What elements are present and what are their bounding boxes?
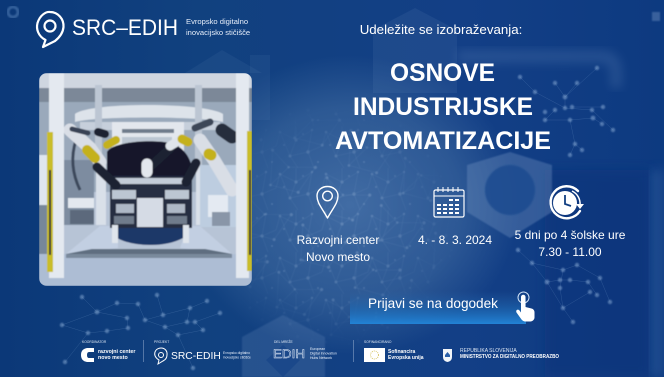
logo: SRC-EDIH small: PROJEKT	[154, 340, 169, 344]
logo: SRC-EDIH small: Evropsko digitalno	[223, 351, 250, 355]
icon: location speech pin	[37, 12, 64, 47]
icon: calendar	[434, 187, 464, 217]
icon: clock with arrow	[551, 186, 584, 218]
network: lower right	[516, 248, 612, 324]
logo tagline: inovacijsko stičišče	[186, 28, 250, 37]
info: date	[418, 187, 492, 247]
safety columns	[49, 73, 64, 278]
logo: SRC-EDIH small	[154, 340, 251, 364]
logo: EDIH network: EDIH	[273, 347, 305, 361]
icon: map pin	[317, 186, 338, 218]
logo: EU co-funded	[364, 340, 424, 362]
info: schedule	[515, 186, 626, 259]
photo: robot arms assembling a car	[39, 73, 252, 286]
logo: EDIH network: European	[310, 347, 325, 351]
logo wordmark: SRC–EDIH	[72, 15, 178, 40]
logo: EDIH network: Hubs Network	[310, 356, 332, 360]
logo: razvojni center novo mesto: novo mesto	[98, 355, 128, 361]
logo: razvojni center novo mesto	[81, 340, 135, 362]
logo: EDIH network: Digital Innovation	[310, 352, 337, 356]
logo: razvojni center novo mesto: KOORDINATOR	[82, 340, 107, 344]
title	[335, 59, 551, 155]
car	[107, 141, 193, 178]
icon: tapping hand	[516, 292, 534, 322]
logo: EU co-funded: Evropska unija	[388, 355, 424, 361]
schedule text: 5 dni po 4 šolske ure	[515, 228, 626, 242]
network: lower left	[60, 293, 222, 370]
logo tagline: Evropsko digitalno	[186, 17, 248, 26]
logo: SRC-EDIH small: inovacijsko stičišče	[223, 356, 251, 360]
date text: 4. - 8. 3. 2024	[418, 233, 492, 247]
logo: razvojni center novo mesto: razvojni center	[98, 349, 135, 355]
logo: EDIH network	[273, 339, 337, 361]
network: top right	[518, 66, 615, 157]
title: INDUSTRIJSKE	[353, 93, 533, 121]
footer logos	[81, 339, 559, 364]
logo: SRC-EDIH small: SRC-EDIH	[171, 351, 221, 362]
logo: EU co-funded: SOFINANCIRANO	[364, 340, 392, 344]
info: location	[297, 186, 379, 264]
title: OSNOVE	[390, 59, 495, 87]
logo: Republika Slovenija ministry: REPUBLIKA SLOVENIJA	[460, 348, 517, 354]
intro line: Udeležite se izobraževanja:	[360, 22, 522, 37]
right machinery	[200, 165, 236, 227]
robot arms	[70, 122, 232, 190]
title: AVTOMATIZACIJE	[335, 127, 551, 155]
button: register	[350, 291, 534, 324]
logo: Republika Slovenija ministry	[443, 348, 559, 362]
location text: Novo mesto	[306, 250, 370, 264]
logo: SRC-EDIH	[37, 12, 250, 47]
logo: Republika Slovenija ministry: MINISTRSTVO ZA DIGITALNO PREOBRAZBO	[460, 354, 559, 360]
logo: EDIH network: DEL MREŽE	[274, 339, 294, 344]
location text: Razvojni center	[297, 233, 379, 247]
floor	[39, 254, 252, 286]
logo: EU co-funded: Sofinancira	[388, 349, 415, 355]
button label: Prijavi se na dogodek	[368, 296, 498, 311]
left machinery	[64, 160, 94, 225]
schedule text: 7.30 - 11.00	[538, 245, 602, 259]
